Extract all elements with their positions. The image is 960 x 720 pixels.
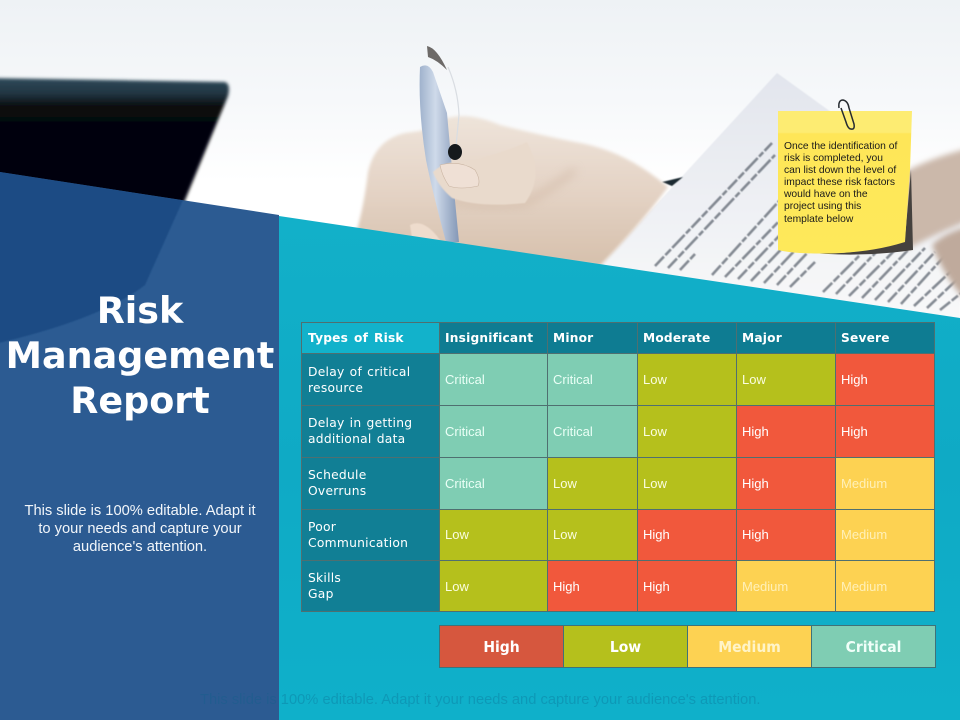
document: [598, 73, 960, 330]
risk matrix table: Medium: [841, 527, 887, 542]
risk matrix table: Schedule: [308, 468, 367, 482]
legend: Low: [610, 638, 641, 656]
legend: Medium: [718, 638, 781, 656]
teal panel: [279, 216, 960, 720]
risk matrix table: Low: [742, 372, 766, 387]
risk matrix table: Low: [445, 527, 469, 542]
risk matrix table: resource: [308, 381, 363, 395]
subtitle text: [24, 503, 256, 555]
risk matrix table: Low: [643, 424, 667, 439]
risk matrix table: Critical: [553, 424, 593, 439]
title: [6, 289, 274, 422]
risk matrix table: High: [742, 476, 769, 491]
risk matrix table: Insignificant: [445, 331, 533, 345]
risk matrix table: Low: [553, 527, 577, 542]
risk matrix table: Severe: [841, 331, 890, 345]
risk matrix table: Poor: [308, 520, 336, 534]
risk matrix table: Delay in getting: [308, 416, 412, 430]
right hand: [905, 148, 960, 250]
legend: [439, 625, 936, 668]
subtitle text: audience's attention.: [73, 539, 207, 555]
risk matrix table: Medium: [841, 579, 887, 594]
risk matrix table: Skills: [308, 571, 341, 585]
risk matrix table: [301, 322, 935, 612]
writing hand: [357, 46, 683, 266]
risk matrix table: Delay of critical: [308, 365, 410, 379]
risk matrix table: Critical: [445, 372, 485, 387]
risk matrix table: Major: [742, 331, 782, 345]
sticky note: [778, 100, 913, 255]
title: Management: [6, 334, 274, 377]
risk matrix table: High: [643, 527, 670, 542]
sticky note text: Once the identification of: [784, 141, 897, 152]
title: Risk: [97, 289, 183, 332]
risk matrix table: Minor: [553, 331, 593, 345]
risk matrix table: Low: [643, 372, 667, 387]
legend: High: [483, 638, 520, 656]
legend: Critical: [846, 638, 901, 656]
risk matrix table: Types of Risk: [308, 331, 404, 345]
risk matrix table: Moderate: [643, 331, 710, 345]
risk matrix table: High: [841, 424, 868, 439]
risk matrix table: High: [742, 527, 769, 542]
risk matrix table: High: [643, 579, 670, 594]
sticky note text: impact these risk factors: [784, 177, 895, 188]
sticky note text: project using this: [784, 201, 861, 212]
sticky note text: template below: [784, 214, 853, 225]
title: Report: [70, 379, 210, 422]
risk matrix table: Critical: [553, 372, 593, 387]
risk matrix table: Low: [445, 579, 469, 594]
blue panel: [0, 170, 279, 720]
subtitle text: to your needs and capture your: [38, 521, 242, 537]
risk matrix table: additional data: [308, 432, 405, 446]
laptop: [0, 78, 229, 205]
icon: paperclip: [839, 100, 854, 129]
risk matrix table: Low: [643, 476, 667, 491]
risk matrix table: Low: [553, 476, 577, 491]
risk matrix table: Medium: [742, 579, 788, 594]
risk matrix table: High: [841, 372, 868, 387]
risk matrix table: Overruns: [308, 484, 366, 498]
sticky note text: can list down the level of: [784, 165, 896, 176]
risk matrix table: Critical: [445, 424, 485, 439]
sticky note text: would have on the: [784, 189, 868, 200]
risk matrix table: High: [742, 424, 769, 439]
risk matrix table: High: [553, 579, 580, 594]
risk matrix table: Gap: [308, 587, 334, 601]
risk matrix table: Medium: [841, 476, 887, 491]
risk matrix table: Communication: [308, 536, 408, 550]
faint footer text: This slide is 100% editable. Adapt it your needs and capture your audience's attention.: [200, 692, 760, 708]
subtitle text: This slide is 100% editable. Adapt it: [24, 503, 256, 519]
sticky note text: [784, 141, 898, 225]
risk matrix table: Critical: [445, 476, 485, 491]
sticky note text: risk is completed, you: [784, 153, 883, 164]
